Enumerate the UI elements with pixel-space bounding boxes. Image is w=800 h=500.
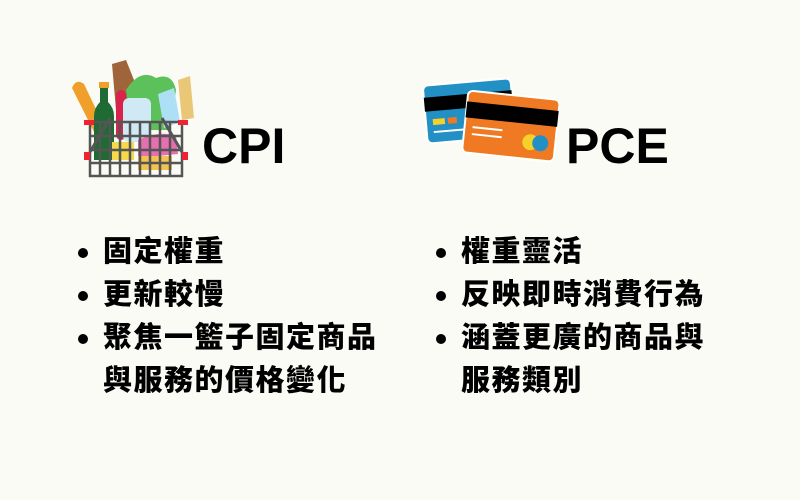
orange card bbox=[462, 90, 560, 162]
item bbox=[78, 322, 378, 397]
item: 固定權重 bbox=[103, 236, 225, 268]
blue card bbox=[423, 78, 515, 144]
crackers bbox=[178, 76, 194, 120]
red sausage bbox=[116, 90, 126, 140]
title: CPI: CPI bbox=[202, 118, 285, 174]
pink meat bbox=[138, 134, 178, 158]
item: 權重靈活 bbox=[461, 236, 583, 268]
item: 更新較慢 bbox=[103, 279, 225, 311]
item bbox=[436, 322, 705, 397]
greens bbox=[126, 75, 176, 130]
item: 與服務的價格變化 bbox=[103, 365, 347, 397]
item: 涵蓋更廣的商品與 bbox=[461, 322, 705, 354]
title: PCE: PCE bbox=[566, 118, 669, 174]
milk jug bbox=[123, 98, 151, 142]
cheese box bbox=[112, 142, 134, 160]
bread bbox=[72, 82, 104, 132]
icon: grocery basket bbox=[72, 60, 194, 178]
list: CPI points bbox=[78, 236, 378, 397]
item: 服務類別 bbox=[461, 365, 583, 397]
bottle bbox=[94, 88, 114, 160]
item: 聚焦一籃子固定商品 bbox=[103, 322, 378, 354]
milk carton bbox=[158, 88, 180, 128]
icon: credit cards bbox=[422, 78, 560, 162]
brown bag bbox=[112, 60, 134, 110]
list: PCE points bbox=[436, 236, 705, 397]
basket frame bbox=[90, 118, 182, 176]
item: 反映即時消費行為 bbox=[461, 279, 705, 311]
